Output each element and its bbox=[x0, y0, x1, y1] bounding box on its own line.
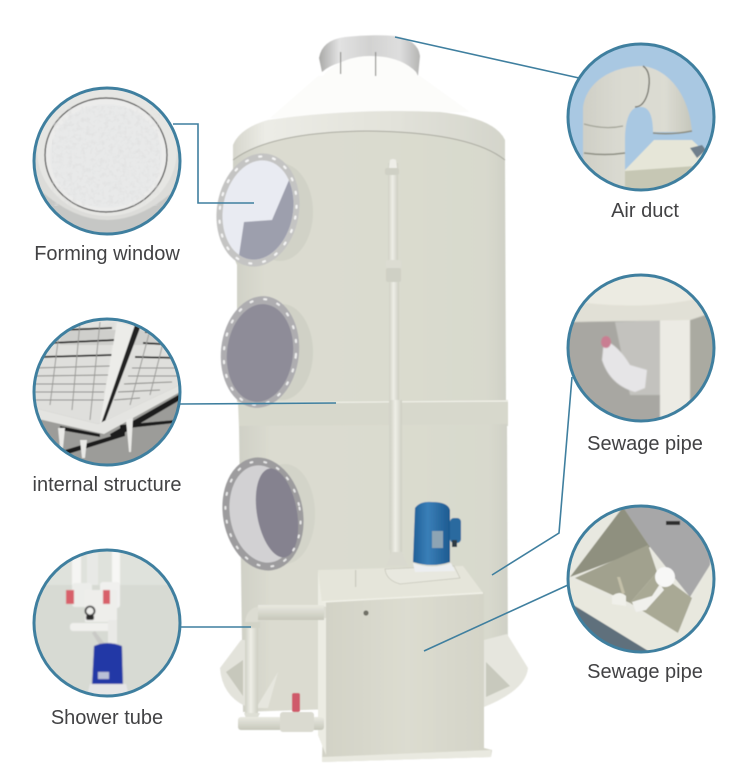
inspection window: middle bbox=[215, 292, 313, 412]
leader line: forming window bbox=[173, 124, 254, 203]
detail photo: pipe outlet on tank wall bbox=[570, 276, 712, 420]
label: internal structure: internal structure bbox=[33, 474, 181, 496]
vertical return pipe bbox=[385, 159, 408, 566]
label: forming window: Forming window bbox=[34, 243, 180, 265]
tower top cone bbox=[270, 76, 470, 118]
panel: forming window bbox=[30, 84, 185, 265]
panel: upper sewage pipe bbox=[565, 270, 720, 455]
leader line: shower tube bbox=[180, 626, 251, 628]
panel: shower tube bbox=[30, 545, 185, 729]
label: shower tube: Shower tube bbox=[51, 707, 163, 729]
inspection window: lower open bbox=[214, 451, 315, 577]
tower upper body bbox=[233, 131, 506, 402]
tower middle band bbox=[238, 400, 508, 428]
label: lower sewage pipe: Sewage pipe bbox=[587, 661, 703, 683]
label: air duct: Air duct bbox=[611, 200, 679, 222]
tank bbox=[318, 566, 492, 762]
inspection window: forming window bbox=[216, 153, 312, 266]
detail photo: grating and supports bbox=[36, 320, 178, 464]
leader line: lower sewage pipe bbox=[424, 585, 568, 651]
spray tower bbox=[208, 35, 528, 762]
top rim bbox=[233, 111, 505, 160]
detail photo: tank interior with float valve bbox=[570, 508, 712, 650]
top collar bbox=[319, 35, 420, 80]
panel: internal structure bbox=[30, 315, 185, 496]
panel: lower sewage pipe bbox=[562, 502, 720, 683]
leader line: air duct bbox=[395, 37, 579, 78]
pump motor bbox=[413, 502, 461, 572]
tower lower body bbox=[239, 424, 508, 712]
base skirt bbox=[220, 634, 528, 708]
panel: air duct bbox=[565, 40, 720, 222]
detail photo: curved duct against sky bbox=[570, 46, 712, 188]
external circulation pipework bbox=[238, 605, 326, 732]
leader line: internal structure bbox=[180, 403, 336, 404]
detail photo: pump with valves bbox=[36, 552, 178, 694]
label: upper sewage pipe: Sewage pipe bbox=[587, 433, 703, 455]
motor base plate bbox=[385, 566, 460, 584]
detail photo: packing seen through window bbox=[36, 90, 178, 232]
leader line: upper sewage pipe bbox=[492, 377, 572, 575]
